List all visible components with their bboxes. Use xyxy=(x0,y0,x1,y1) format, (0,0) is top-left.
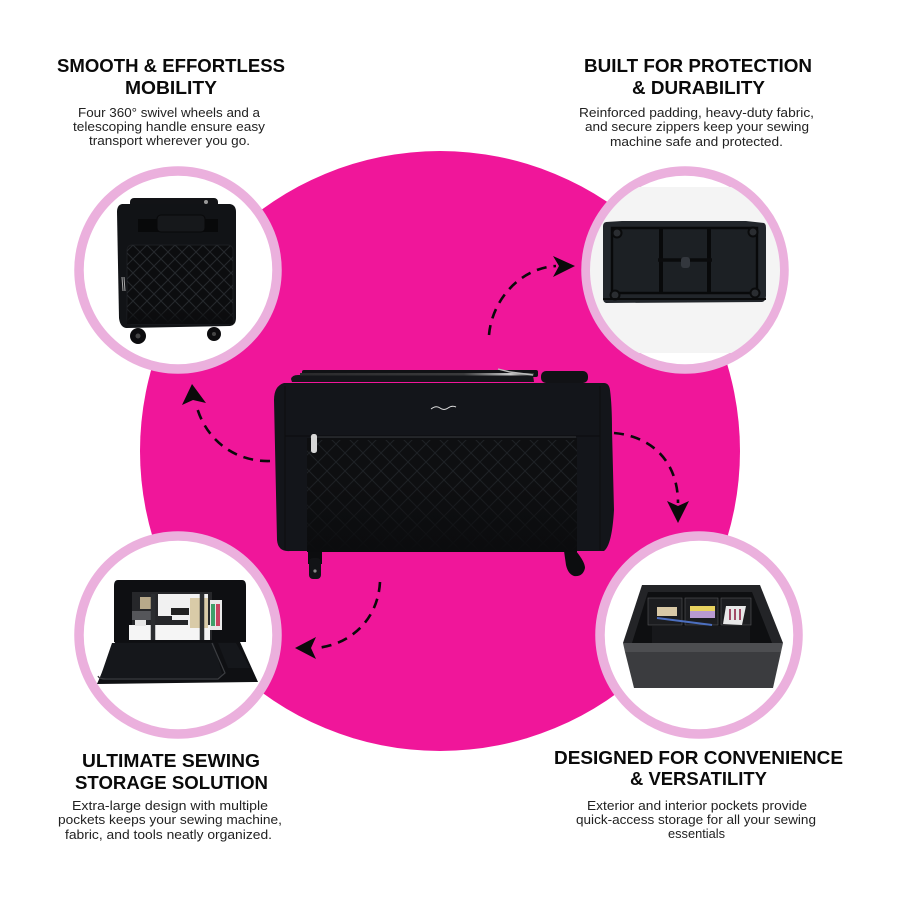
heading: mobility: SMOOTH & EFFORTLESS xyxy=(57,55,285,76)
heading: convenience: & VERSATILITY xyxy=(630,768,768,789)
icon: open trolley with sewing machine photo xyxy=(79,536,277,734)
text: mobility description: transport wherever you go. xyxy=(89,134,250,148)
heading: storage: ULTIMATE SEWING xyxy=(82,750,260,771)
heading: convenience xyxy=(554,747,843,789)
background pink circle xyxy=(140,151,740,751)
heading: protection: BUILT FOR PROTECTION xyxy=(584,55,812,76)
text: convenience description: quick-access storage for all your sewing xyxy=(576,813,816,827)
text: protection description: Reinforced padding, heavy-duty fabric, xyxy=(579,106,814,120)
text: mobility description: telescoping handle ensure easy xyxy=(73,120,266,134)
arrow: to mobility xyxy=(182,384,270,461)
logo xyxy=(431,406,456,410)
heading: storage: STORAGE SOLUTION xyxy=(75,772,268,793)
top handle bar xyxy=(291,369,588,383)
text: convenience description xyxy=(576,799,816,841)
text: storage description: pockets keeps your sewing machine, xyxy=(58,813,282,827)
text: mobility description: Four 360° swivel wheels and a xyxy=(78,106,260,120)
heading: storage xyxy=(75,750,268,793)
text: protection description: and secure zippers keep your sewing xyxy=(585,120,809,134)
text: storage description xyxy=(58,799,282,842)
heading: mobility xyxy=(57,55,285,98)
text: storage description: fabric, and tools neatly organized. xyxy=(65,828,272,842)
panel: storage xyxy=(58,536,282,842)
text: storage description: Extra-large design with multiple xyxy=(72,799,268,813)
arrow: to protection xyxy=(489,256,575,335)
heading: protection xyxy=(584,55,812,98)
heading: protection: & DURABILITY xyxy=(632,77,766,98)
panel: mobility xyxy=(57,55,285,369)
icon: trolley underside photo xyxy=(586,171,784,369)
text: mobility description xyxy=(73,106,266,148)
panel: convenience xyxy=(554,536,843,841)
wheels xyxy=(308,550,585,579)
zipper pull xyxy=(311,434,317,453)
arrow: to convenience xyxy=(614,433,689,523)
trolley body xyxy=(274,383,614,551)
main product: quilted sewing trolley xyxy=(274,369,614,579)
icon: open storage compartment photo xyxy=(600,536,798,734)
heading: mobility: MOBILITY xyxy=(125,77,218,98)
panel: protection xyxy=(579,55,814,369)
text: protection description xyxy=(579,106,814,149)
text: convenience description: Exterior and interior pockets provide xyxy=(587,799,807,813)
icon: upright trolley photo xyxy=(79,171,277,369)
arrow: to storage xyxy=(295,582,380,659)
heading: convenience: DESIGNED FOR CONVENIENCE xyxy=(554,747,843,768)
text: protection description: machine safe and protected. xyxy=(610,135,783,149)
text: convenience description: essentials xyxy=(668,827,725,841)
quilted front pocket xyxy=(307,437,577,552)
